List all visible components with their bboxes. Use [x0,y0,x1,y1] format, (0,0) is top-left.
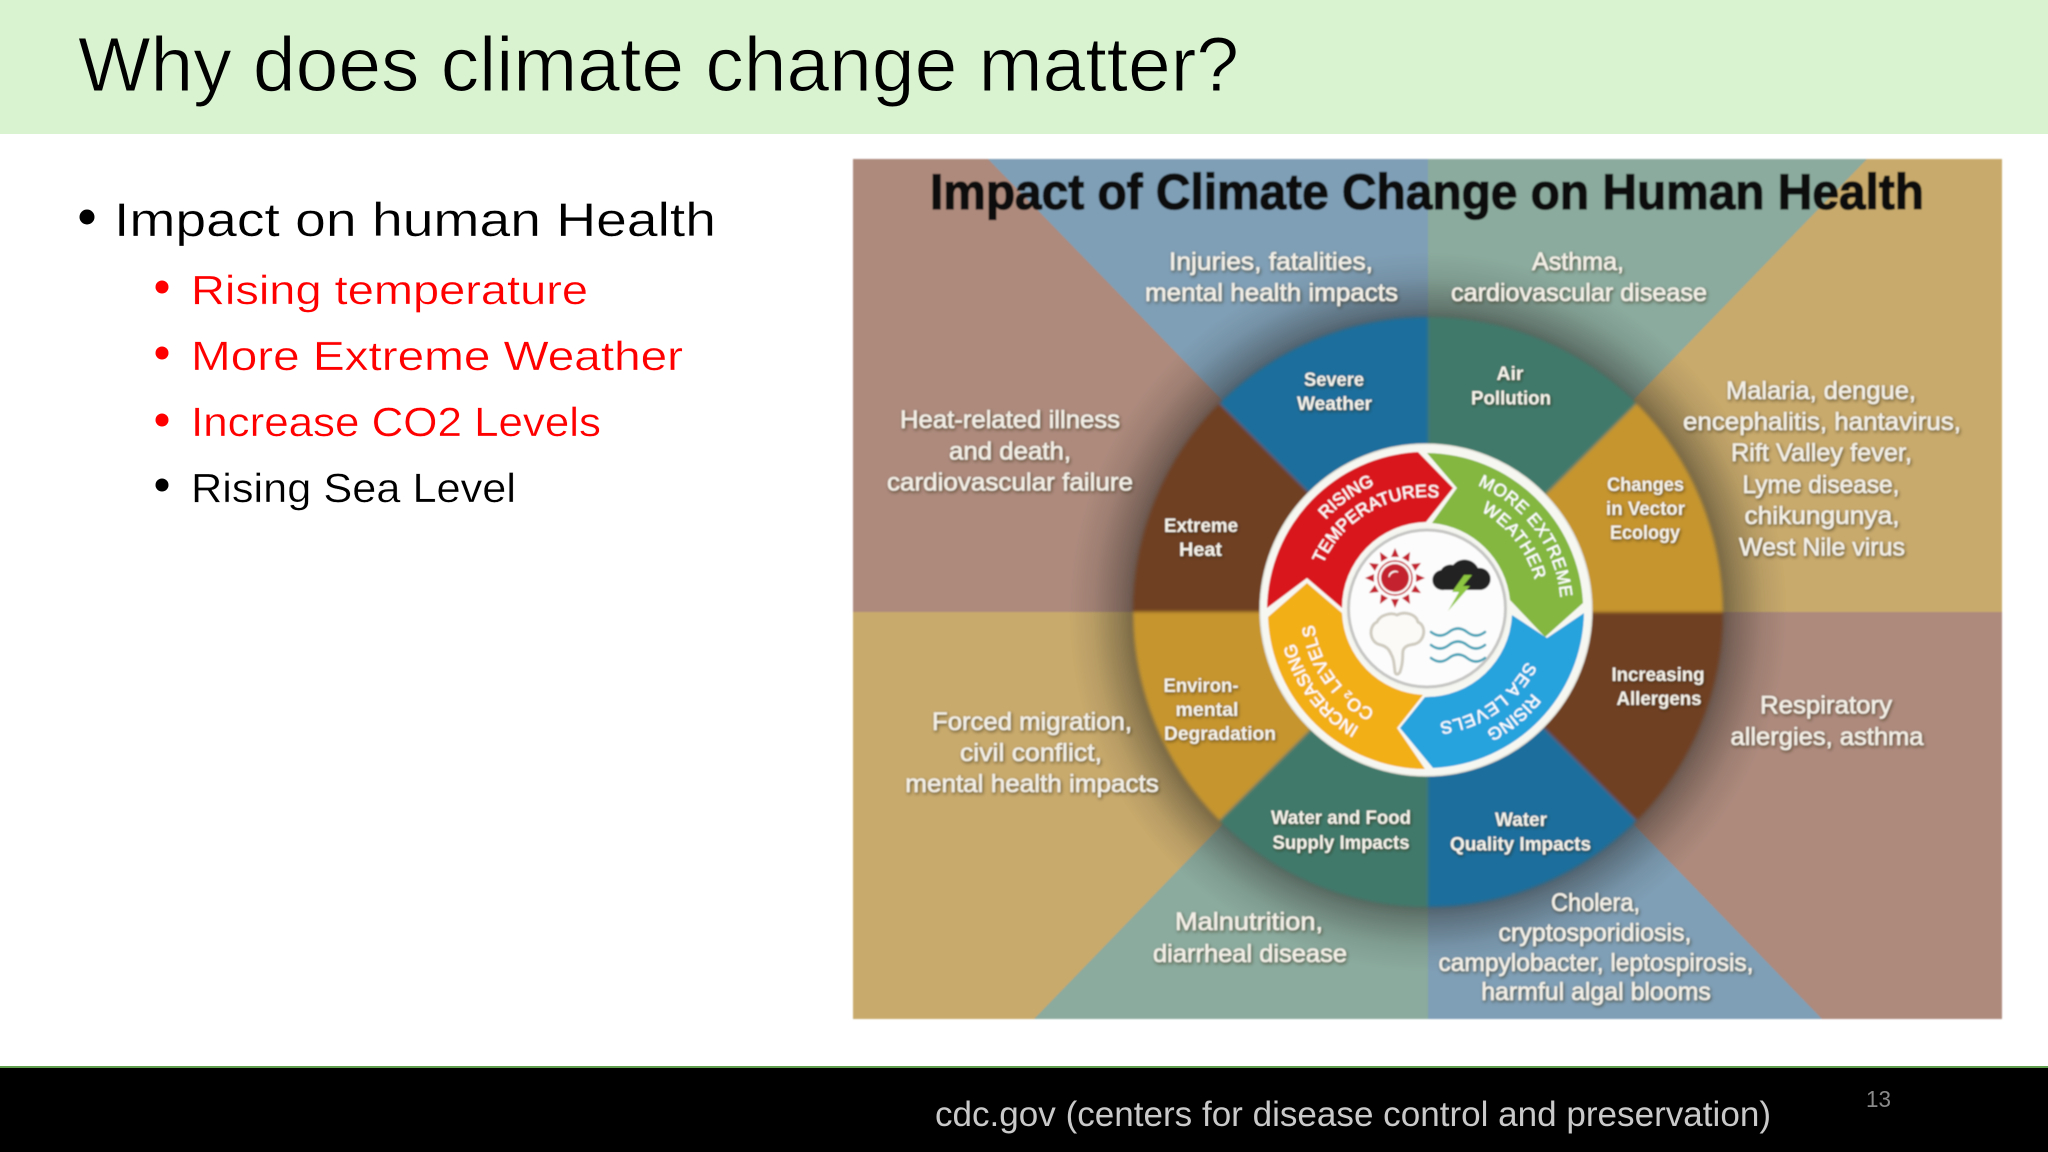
label: severe weather: Weather [1297,394,1373,415]
label: respiratory allergies: Respiratory [1760,692,1893,720]
label: environmental degradation: Degradation [1164,724,1276,745]
label: vector ecology [1606,475,1686,544]
label: vector-borne diseases: Lyme disease, [1742,471,1900,499]
label: forced migration: mental health impacts [905,770,1159,798]
panel background quadrants [853,159,2002,1019]
label: increasing allergens: Increasing [1612,665,1704,686]
label: air pollution: Pollution [1471,388,1551,410]
label: environmental degradation: Environ- [1164,676,1238,697]
label: water and food [1271,808,1411,854]
label: asthma [1451,248,1707,307]
arrow: rising sea levels [1400,613,1584,768]
caption: more extreme weather: WEATHER [1482,500,1546,580]
sector: water quality [1428,612,1637,907]
label: forced migration [905,708,1159,798]
label: vector-borne diseases: encephalitis, hantavirus, [1683,408,1961,436]
icon: sun [1365,548,1425,608]
label: cholera: campylobacter, leptospirosis, [1438,949,1754,977]
arrow captions [1283,474,1574,741]
label: heat-related illness: and death, [949,438,1071,466]
label: water quality: Water [1495,810,1548,831]
label: vector-borne diseases: chikungunya, [1744,502,1900,530]
label: cholera: cryptosporidiosis, [1498,919,1692,947]
footer bar [0,1066,2048,1152]
sector: allergens [1428,612,1723,821]
central ring disc [1260,444,1592,776]
caption: rising temperatures: TEMPERATURES [1310,483,1440,562]
label: respiratory allergies [1730,692,1924,751]
label: injuries [1145,248,1398,307]
label: vector ecology: Changes [1607,475,1684,496]
label: vector ecology: Ecology [1610,523,1680,544]
label: vector ecology: in Vector [1606,499,1686,520]
label: water and food: Supply Impacts [1272,833,1410,854]
sector: extreme heat [1133,403,1428,612]
label: asthma: cardiovascular disease [1451,279,1707,307]
label: asthma: Asthma, [1532,248,1624,276]
sector: environmental degradation [1133,612,1428,821]
label: air pollution: Air [1496,364,1524,385]
panel: climate health infographic [852,158,2003,1020]
sub-bullet: increase CO2 levels: Increase CO2 Levels [191,399,601,445]
inner wheel labels [1164,364,1704,856]
label: injuries: mental health impacts [1145,279,1398,307]
label: cholera: harmful algal blooms [1481,978,1711,1006]
sector: air pollution [1428,317,1637,612]
sub-bullet: more extreme weather: More Extreme Weather [191,333,683,379]
label: malnutrition [1153,908,1347,968]
label: cholera [1438,889,1754,1006]
caption: increasing CO2 levels: INCREASING [1283,643,1360,738]
caption: rising temperatures: RISING [1316,474,1374,520]
arrow: more extreme weather [1427,453,1583,637]
label: forced migration: Forced migration, [932,708,1132,736]
sector: severe weather [1219,317,1428,612]
panel title: Impact of Climate Change on Human Health [930,164,1924,220]
label: environmental degradation [1164,676,1276,745]
label: extreme heat: Extreme [1164,516,1238,537]
label: water quality: Quality Impacts [1450,835,1591,856]
label: air pollution [1471,364,1551,410]
bullet: impact on human health: Impact on human Health [114,193,716,246]
icon: storm cloud [1432,560,1491,611]
label: malnutrition: Malnutrition, [1175,908,1323,936]
slide number: 13 [1866,1086,1891,1112]
header band [0,0,2048,134]
icon: waves [1431,628,1485,662]
footer source text: cdc.gov (centers for disease control and preservation) [935,1095,1771,1134]
label: water quality [1450,810,1591,856]
outer ring of health impact labels [887,248,1961,1006]
label: extreme heat [1164,516,1238,561]
label: environmental degradation: mental [1176,700,1238,721]
arrow: increasing CO2 levels [1268,583,1425,769]
centre disc [1345,526,1509,690]
sub-bullet: rising sea level: Rising Sea Level [191,465,516,511]
arrow: rising temperatures [1267,452,1453,608]
wheel of eight sectors [1133,317,1723,907]
label: heat-related illness [887,406,1133,496]
label: heat-related illness: cardiovascular failure [887,468,1133,496]
label: heat-related illness: Heat-related illness [900,406,1120,434]
label: increasing allergens [1612,665,1704,710]
label: water and food: Water and Food [1271,808,1411,829]
bullet list [80,193,716,511]
label: severe weather [1297,370,1373,415]
sector: vector ecology [1428,403,1723,612]
wheel shadow [1068,252,1788,972]
label: cholera: Cholera, [1551,889,1640,917]
label: vector-borne diseases: West Nile virus [1739,534,1905,562]
label: increasing allergens: Allergens [1616,689,1702,710]
title: Why does climate change matter? [78,22,1239,108]
caption: increasing CO2 levels: CO₂ LEVELS [1301,624,1374,720]
label: extreme heat: Heat [1179,540,1223,561]
label: malnutrition: diarrheal disease [1153,940,1347,968]
label: severe weather: Severe [1304,370,1364,391]
caption: more extreme weather: MORE EXTREME [1478,474,1574,598]
icon: smoke cloud [1371,613,1424,674]
label: forced migration: civil conflict, [960,739,1102,767]
sub-bullet: rising temperature: Rising temperature [191,267,588,313]
label: injuries: Injuries, fatalities, [1169,248,1373,276]
label: vector-borne diseases: Rift Valley fever, [1731,439,1912,467]
caption: rising sea levels: RISING [1486,692,1542,741]
label: respiratory allergies: allergies, asthma [1730,723,1924,751]
sector: water and food [1219,612,1428,907]
label: vector-borne diseases [1683,377,1961,562]
caption: rising sea levels: SEA LEVELS [1440,662,1537,736]
label: vector-borne diseases: Malaria, dengue, [1726,377,1916,405]
